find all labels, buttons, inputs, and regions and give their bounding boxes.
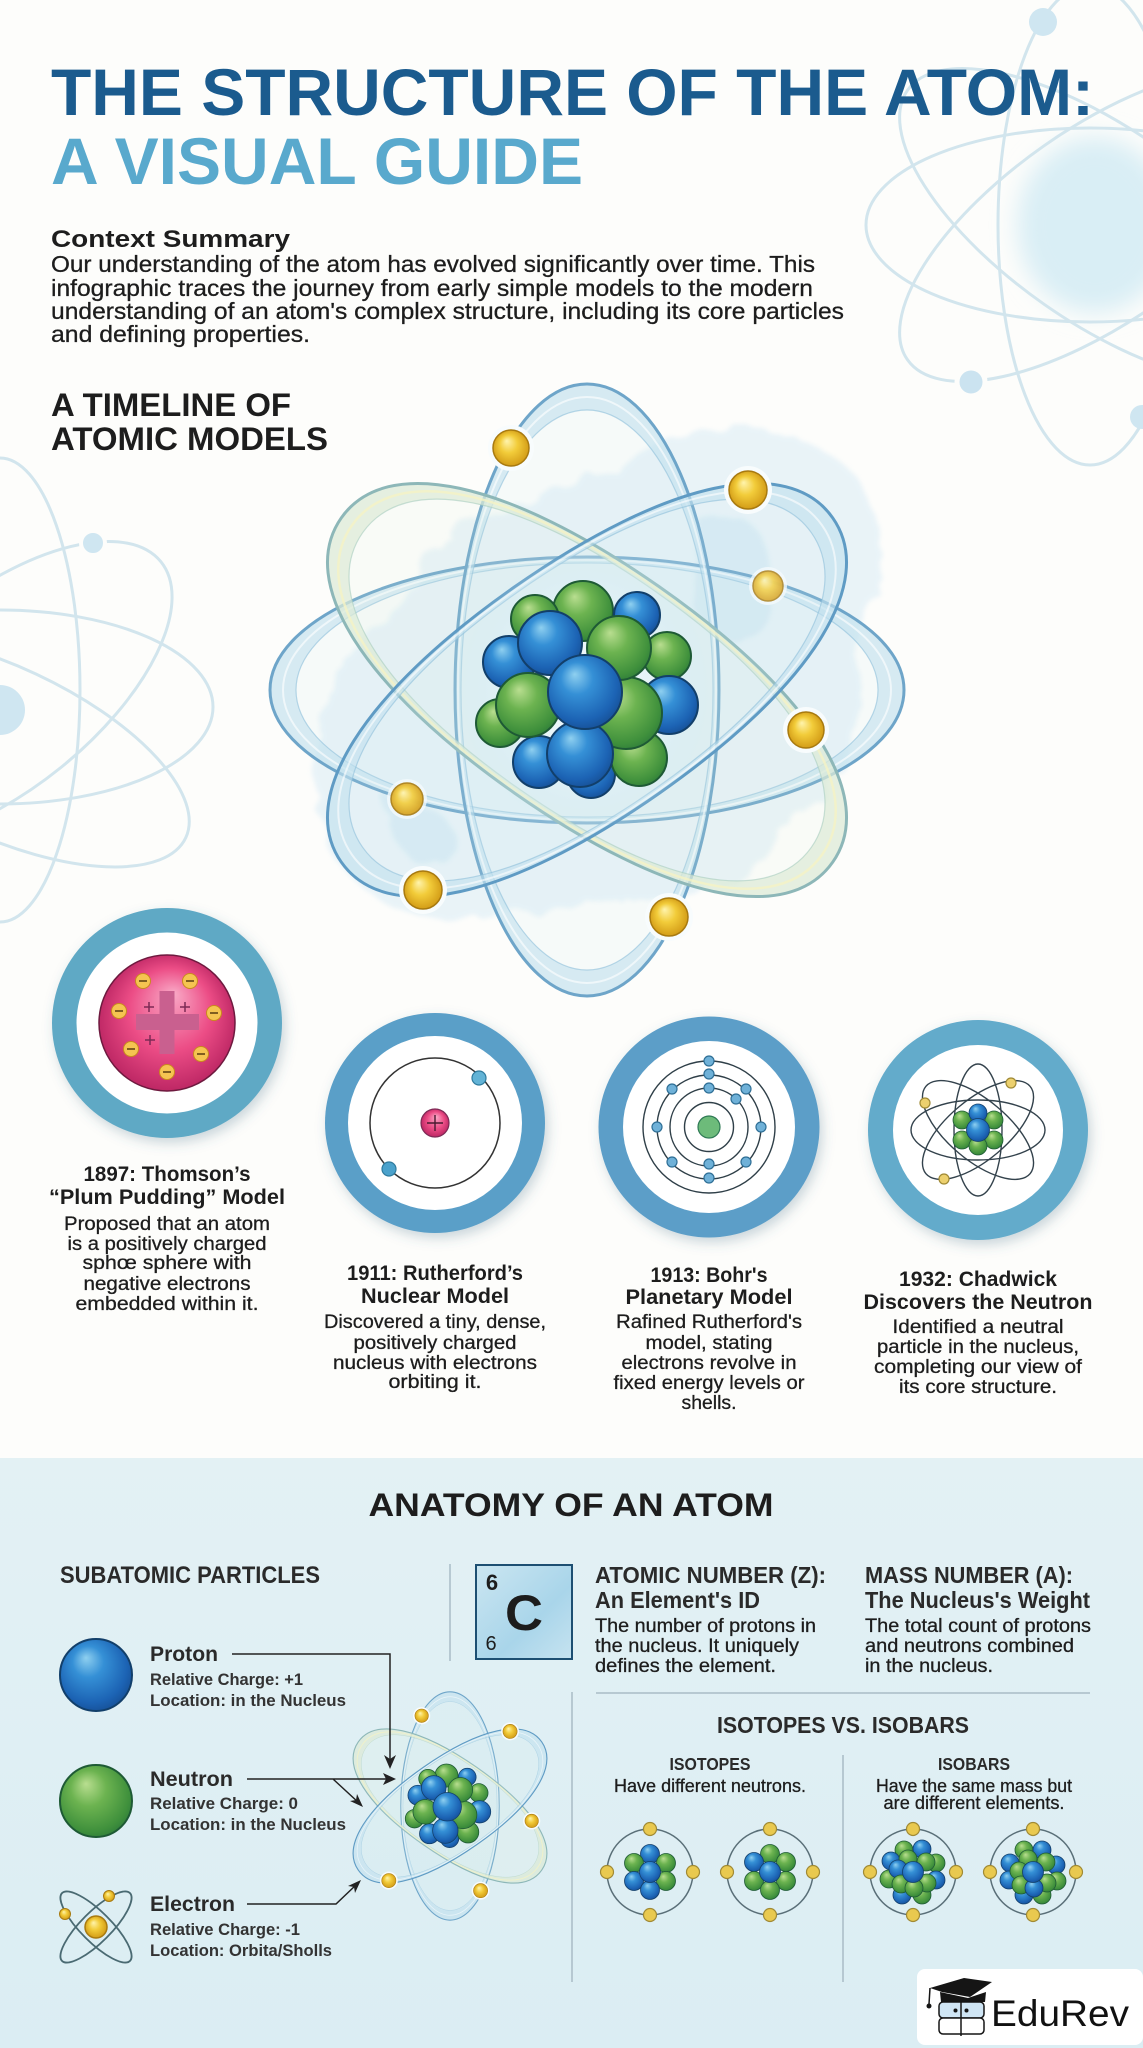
Chadwick heading: 1932: Chadwick bbox=[899, 1267, 1057, 1291]
title: THE STRUCTURE OF THE ATOM: bbox=[51, 55, 1094, 129]
element box: carbon: 6 bbox=[485, 1633, 497, 1655]
Thomson description: Proposed that an atom bbox=[64, 1213, 270, 1235]
small labelled atom bbox=[331, 1692, 569, 1920]
Thomson description: negative electrons bbox=[84, 1273, 251, 1295]
element box: carbon: C bbox=[505, 1585, 543, 1641]
particle: electron: Electron bbox=[150, 1893, 235, 1916]
Rutherford heading: 1911: Rutherford’s bbox=[347, 1261, 523, 1285]
arrow: neutron to nucleus bbox=[247, 1773, 396, 1807]
element box: carbon: 6 bbox=[486, 1570, 498, 1595]
main atom illustration bbox=[269, 384, 905, 996]
Thomson heading: 1897: Thomson’s bbox=[84, 1162, 251, 1186]
icon: planetary model bbox=[598, 1016, 820, 1238]
decorative atom: left side bbox=[0, 458, 222, 922]
Thomson description: sphœ sphere with bbox=[82, 1252, 252, 1274]
particle: neutron bbox=[60, 1765, 346, 1837]
Chadwick description bbox=[874, 1316, 1083, 1398]
Bohr description: Rafined Rutherford's bbox=[616, 1311, 802, 1333]
Rutherford description: orbiting it. bbox=[388, 1371, 482, 1393]
Rutherford description: positively charged bbox=[354, 1332, 516, 1354]
Chadwick description: Identified a neutral bbox=[892, 1316, 1064, 1338]
isobar atom 2 bbox=[984, 1822, 1082, 1922]
Rutherford description bbox=[324, 1311, 546, 1393]
logo: EduRev bbox=[917, 1969, 1143, 2045]
context summary: Context Summary bbox=[51, 226, 291, 253]
text block: atomic number: ATOMIC NUMBER (Z): bbox=[595, 1562, 826, 1588]
text block: mass number: in the nucleus. bbox=[865, 1656, 993, 1677]
timeline item: Thomson 1897 bbox=[49, 908, 285, 1315]
particle: electron: Location: Orbita/Sholls bbox=[150, 1941, 332, 1960]
arrow: proton to nucleus bbox=[232, 1654, 396, 1769]
timeline item: Chadwick 1932 bbox=[864, 1020, 1092, 1398]
Bohr description: model, stating bbox=[646, 1332, 772, 1354]
timeline item: Bohr 1913 bbox=[598, 1016, 820, 1414]
particle: electron: Relative Charge: -1 bbox=[150, 1920, 300, 1939]
Thomson heading bbox=[49, 1162, 285, 1209]
Chadwick description: completing our view of bbox=[874, 1356, 1083, 1378]
context summary: Our understanding of the atom has evolved significantly over time. This bbox=[51, 251, 815, 277]
heading: timeline of atomic models: A TIMELINE OF bbox=[51, 387, 291, 423]
heading: timeline of atomic models bbox=[51, 387, 328, 457]
context summary: understanding of an atom's complex structure, including its core particles bbox=[51, 298, 844, 324]
particle: neutron: Relative Charge: 0 bbox=[150, 1794, 298, 1813]
heading: timeline of atomic models: ATOMIC MODELS bbox=[51, 421, 328, 457]
icon: graduate book bbox=[926, 1978, 992, 2036]
text block: isobars bbox=[876, 1754, 1072, 1813]
Thomson description: is a positively charged bbox=[68, 1233, 266, 1255]
Bohr heading: 1913: Bohr's bbox=[650, 1263, 768, 1287]
particle: proton: Relative Charge: +1 bbox=[150, 1670, 303, 1689]
Rutherford description: nucleus with electrons bbox=[333, 1352, 537, 1374]
text block: mass number bbox=[865, 1562, 1091, 1677]
heading: isotopes vs isobars: ISOTOPES VS. ISOBARS bbox=[717, 1712, 969, 1738]
Chadwick heading: Discovers the Neutron bbox=[864, 1290, 1092, 1314]
text block: isobars: are different elements. bbox=[884, 1793, 1064, 1813]
Rutherford heading: Nuclear Model bbox=[361, 1284, 509, 1308]
heading: anatomy of an atom: ANATOMY OF AN ATOM bbox=[368, 1487, 774, 1523]
Chadwick description: particle in the nucleus, bbox=[877, 1336, 1079, 1358]
particle: electron bbox=[51, 1882, 332, 1972]
text block: atomic number bbox=[595, 1562, 826, 1677]
text block: atomic number: The number of protons in bbox=[595, 1616, 816, 1637]
panel: anatomy of an atom background bbox=[0, 1458, 1143, 2048]
text block: isotopes: ISOTOPES bbox=[670, 1754, 750, 1774]
Thomson description: embedded within it. bbox=[76, 1293, 258, 1315]
particle: neutron: Location: in the Nucleus bbox=[150, 1815, 346, 1834]
title bbox=[51, 55, 1094, 198]
text block: atomic number: An Element's ID bbox=[595, 1587, 760, 1613]
Thomson heading: “Plum Pudding” Model bbox=[49, 1185, 285, 1209]
Chadwick heading bbox=[864, 1267, 1092, 1314]
icon: nuclear model bbox=[325, 1013, 545, 1233]
context summary: infographic traces the journey from early simple models to the modern bbox=[51, 275, 813, 301]
Thomson description bbox=[64, 1213, 270, 1315]
Bohr description bbox=[614, 1311, 805, 1414]
particle: proton: Proton bbox=[150, 1643, 218, 1666]
decorative atom: upper right bbox=[852, 0, 1143, 465]
Chadwick description: its core structure. bbox=[899, 1376, 1057, 1398]
icon: neutron discovery atom bbox=[868, 1020, 1088, 1240]
Bohr description: shells. bbox=[682, 1392, 736, 1414]
isotope atom 1 bbox=[600, 1822, 700, 1922]
Bohr description: electrons revolve in bbox=[622, 1352, 796, 1374]
heading: subatomic particles: SUBATOMIC PARTICLES bbox=[60, 1562, 320, 1589]
text block: mass number: MASS NUMBER (A): bbox=[865, 1562, 1073, 1588]
particle: proton: Location: in the Nucleus bbox=[150, 1691, 346, 1710]
context summary bbox=[51, 226, 844, 347]
text block: isobars: Have the same mass but bbox=[876, 1776, 1072, 1796]
text block: mass number: The Nucleus's Weight bbox=[865, 1587, 1090, 1613]
particle: proton bbox=[60, 1639, 346, 1711]
timeline item: Rutherford 1911 bbox=[324, 1013, 546, 1393]
Bohr heading bbox=[626, 1263, 792, 1309]
element box: carbon bbox=[476, 1565, 572, 1659]
text block: atomic number: defines the element. bbox=[595, 1656, 776, 1677]
divider: vertical top bbox=[449, 1564, 451, 1661]
text block: isotopes bbox=[614, 1754, 806, 1796]
text block: isotopes: Have different neutrons. bbox=[614, 1776, 806, 1796]
text block: isobars: ISOBARS bbox=[938, 1754, 1010, 1774]
text block: mass number: and neutrons combined bbox=[865, 1636, 1074, 1657]
Rutherford heading bbox=[347, 1261, 523, 1308]
particle: neutron: Neutron bbox=[150, 1768, 233, 1791]
isobar atom 1 bbox=[864, 1822, 962, 1922]
context summary: and defining properties. bbox=[51, 321, 310, 347]
title: A VISUAL GUIDE bbox=[51, 124, 583, 198]
Bohr description: fixed energy levels or bbox=[614, 1372, 805, 1394]
Rutherford description: Discovered a tiny, dense, bbox=[324, 1311, 546, 1333]
arrow: electron to orbit bbox=[247, 1880, 361, 1904]
logo: EduRev: EduRev bbox=[991, 1993, 1130, 2034]
text block: mass number: The total count of protons bbox=[865, 1616, 1091, 1637]
icon: plum pudding model bbox=[52, 908, 282, 1138]
text block: atomic number: the nucleus. It uniquely bbox=[595, 1636, 800, 1657]
isotope atom 2 bbox=[720, 1822, 820, 1922]
Bohr heading: Planetary Model bbox=[626, 1285, 792, 1309]
